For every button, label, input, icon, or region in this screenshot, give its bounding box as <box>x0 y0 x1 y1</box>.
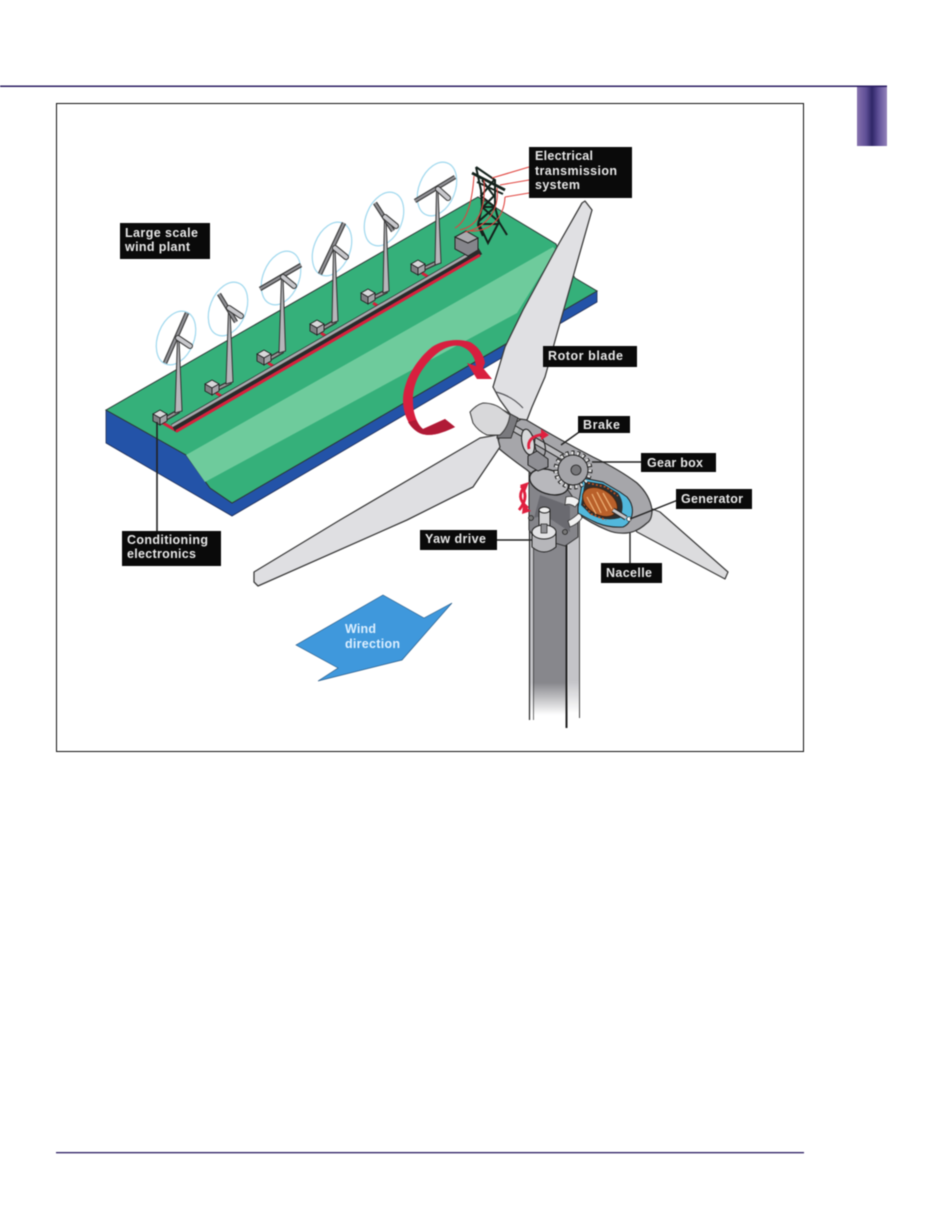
label: conditioning electronics <box>122 422 221 566</box>
top header rule <box>0 86 887 87</box>
red rotation arrow <box>403 340 492 435</box>
turbine 6 <box>410 156 464 280</box>
label: brake <box>561 416 630 445</box>
label: rotor blade <box>543 346 637 367</box>
turbine 3 <box>254 245 308 370</box>
generator <box>577 478 632 527</box>
figure panel frame <box>56 104 804 752</box>
label: nacelle: Nacelle <box>606 566 652 580</box>
label: conditioning electronics: electronics <box>127 547 196 561</box>
label: generator: Generator <box>681 492 743 506</box>
label: gear box <box>592 453 716 472</box>
wind direction arrow: Wind <box>345 622 376 636</box>
label: nacelle <box>601 533 662 583</box>
rotor blade: lower left <box>254 435 500 586</box>
label: electrical transmission system: system <box>535 178 580 192</box>
label: large scale wind plant: Large scale <box>125 226 198 240</box>
label: generator <box>630 489 752 519</box>
power collection line <box>172 249 480 432</box>
label: large scale wind plant: wind plant <box>124 240 191 254</box>
platform: terrain block <box>106 197 597 516</box>
hub and nose cone <box>470 403 518 438</box>
wind direction arrow: direction <box>345 637 400 651</box>
label: large scale wind plant <box>120 223 210 259</box>
brake rotation arrow <box>529 434 545 449</box>
turbine 2 <box>201 276 255 400</box>
turbine 5 <box>357 186 411 310</box>
transmission wires <box>455 167 529 232</box>
turbine 4 <box>305 216 359 340</box>
label: rotor blade: Rotor blade <box>548 349 623 363</box>
yaw drive motor <box>532 507 556 552</box>
nacelle housing <box>497 418 652 533</box>
yaw rotation arrow <box>519 482 531 514</box>
bottom footer rule <box>56 1152 804 1153</box>
label: conditioning electronics: Conditioning <box>127 533 208 547</box>
blade root crease <box>496 392 523 408</box>
brake <box>519 428 548 471</box>
substation transformer <box>455 231 478 256</box>
main shaft <box>508 425 563 457</box>
detail turbine <box>254 201 728 728</box>
wind direction arrow <box>296 595 452 681</box>
tower head collar <box>526 464 582 546</box>
gear box wheel <box>556 453 590 487</box>
label: yaw drive: Yaw drive <box>425 532 486 546</box>
transmission tower <box>472 167 507 243</box>
label: electrical transmission system: transmission <box>535 164 617 178</box>
rotor blade: lower right <box>628 508 728 579</box>
turbine 1 <box>149 305 203 431</box>
label: brake: Brake <box>583 418 620 432</box>
section tab <box>857 87 887 146</box>
wind plant turbines <box>149 156 464 431</box>
tower <box>529 470 580 728</box>
label: electrical transmission system: Electrical <box>535 149 593 163</box>
label: electrical transmission system <box>529 147 632 198</box>
label: yaw drive <box>420 530 532 550</box>
rotor blade: upper <box>493 201 592 420</box>
label: gear box: Gear box <box>647 456 703 470</box>
